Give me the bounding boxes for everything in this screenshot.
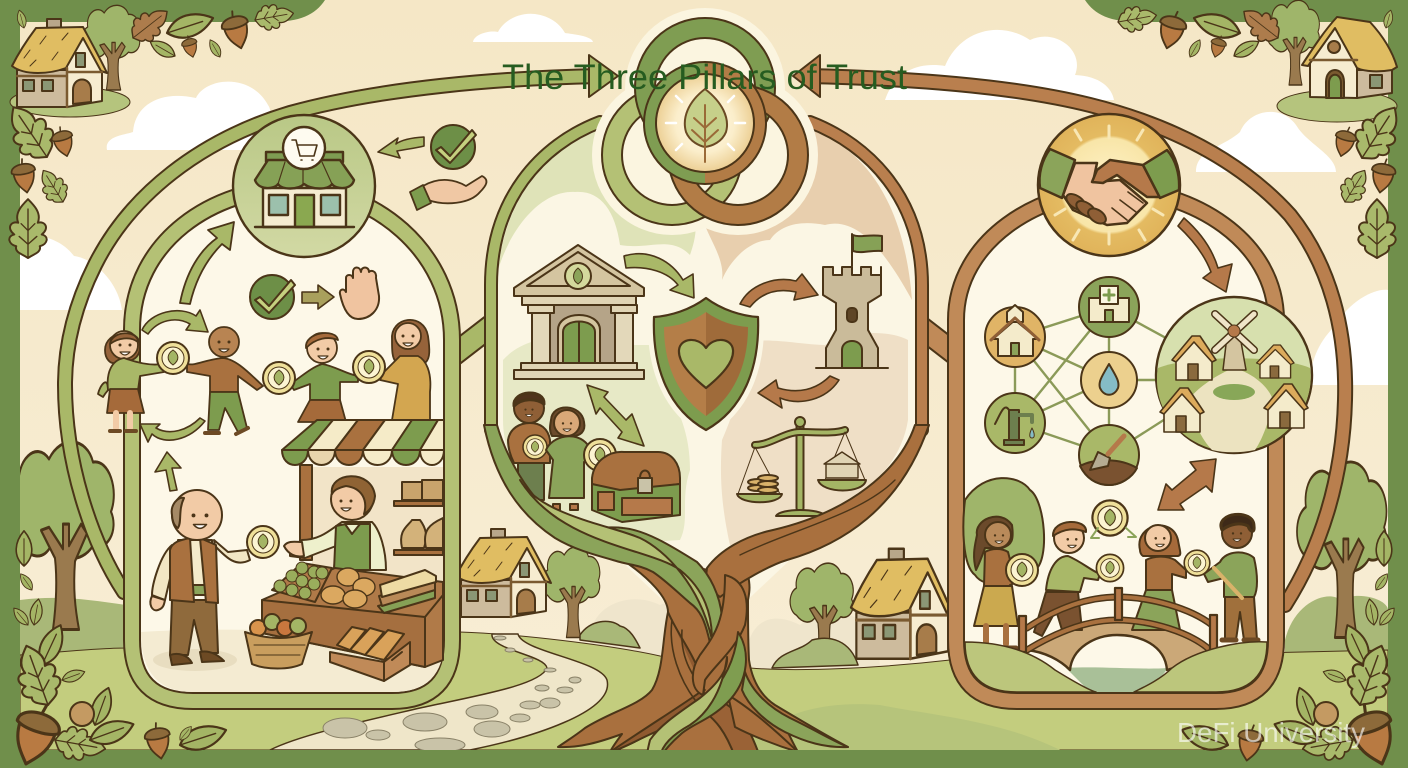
central coin with arrows xyxy=(1091,500,1136,538)
icon: shield with heart xyxy=(654,298,758,430)
person: bald man xyxy=(187,327,263,434)
background trees xyxy=(8,442,1386,668)
up arrow xyxy=(155,452,181,491)
icon: castle tower xyxy=(816,234,888,368)
hand xyxy=(340,268,379,319)
person: girl xyxy=(98,331,164,431)
ring right xyxy=(678,95,798,215)
light green lower strand xyxy=(647,657,727,757)
lower left strand highlight xyxy=(610,612,704,752)
exchange arrow bottom xyxy=(140,418,205,442)
top-left corner cottage xyxy=(10,5,140,117)
icon: store circle xyxy=(233,115,375,257)
fingers brown xyxy=(1064,191,1109,227)
folded cloths xyxy=(378,570,436,613)
icon: open hand xyxy=(410,176,486,210)
icon: top check xyxy=(431,125,476,169)
foliage: top-left xyxy=(0,1,296,258)
node: water xyxy=(1081,352,1137,408)
tint upper right xyxy=(705,130,912,300)
pillar side strokes xyxy=(491,122,922,430)
arrowhead: brown xyxy=(793,55,820,97)
person: woman xyxy=(380,320,430,420)
foliage: bottom-right xyxy=(1179,531,1403,768)
awning xyxy=(282,420,444,465)
green limb upper left xyxy=(484,425,722,643)
icon: balance scale xyxy=(737,417,866,516)
tint lower right xyxy=(721,333,908,545)
panel: left arch xyxy=(132,188,452,701)
bridge xyxy=(1027,620,1210,692)
arrow: check to store xyxy=(378,137,424,158)
person: girl with coin xyxy=(974,517,1038,648)
node: trowel xyxy=(1079,425,1139,485)
outer brown arc xyxy=(806,76,1345,605)
hand right brown xyxy=(1092,160,1160,197)
icon: tree behind people xyxy=(963,478,1044,584)
double arrow xyxy=(1158,459,1216,510)
distant hills xyxy=(20,596,1388,670)
rolling ground xyxy=(20,632,1388,750)
exchange arrow top xyxy=(142,310,208,334)
people with coins xyxy=(508,393,616,510)
cuff left xyxy=(1039,149,1075,198)
halo xyxy=(592,8,818,235)
brown braid xyxy=(693,575,747,695)
node: clinic xyxy=(1079,277,1139,337)
twisted tree trunk xyxy=(484,425,929,757)
floor shading xyxy=(141,630,444,692)
leaf xyxy=(685,89,727,147)
arrow: handshake to village xyxy=(1178,218,1232,292)
market stall xyxy=(247,420,444,667)
hand left skin xyxy=(1063,163,1147,225)
centre disc xyxy=(643,61,767,185)
person: boy with hammer xyxy=(1204,514,1258,640)
cuff right xyxy=(1143,150,1179,198)
watermark: DeFi University xyxy=(1177,717,1365,748)
arrow: shield to tower xyxy=(740,274,818,307)
brown limb upper right xyxy=(705,425,929,597)
icon: check arrow hand xyxy=(250,268,379,319)
coins in row xyxy=(157,342,385,394)
foliage: top-right xyxy=(1116,1,1408,258)
arrow: curve up to store xyxy=(180,222,234,304)
small arrows xyxy=(1091,528,1136,538)
ring left xyxy=(612,95,732,215)
person: boy with coin xyxy=(1034,522,1124,636)
panel: centre pillar xyxy=(491,125,922,640)
arrowhead: green xyxy=(589,55,618,97)
person: boy xyxy=(290,333,358,422)
coin xyxy=(247,526,279,558)
trunk mass xyxy=(558,558,848,757)
person: elderly customer xyxy=(150,490,250,671)
outer green arc xyxy=(65,76,600,592)
windmill xyxy=(1223,336,1246,370)
panel: right arch xyxy=(956,190,1276,701)
crate of bread xyxy=(330,627,410,681)
bread buns xyxy=(321,568,375,608)
post xyxy=(300,465,312,560)
node: village xyxy=(1156,297,1312,453)
bridge rail xyxy=(1019,588,1217,652)
title: The Three Pillars of Trust xyxy=(502,58,907,97)
icon: handshake medallion xyxy=(1038,114,1180,256)
houses xyxy=(1172,336,1216,380)
arrow: temple to chest xyxy=(587,385,644,446)
right green root xyxy=(742,672,848,747)
stall back xyxy=(312,467,443,597)
clouds xyxy=(20,14,1388,385)
panel connector branches xyxy=(452,322,958,356)
person: woman with coin xyxy=(1132,525,1210,630)
node: school xyxy=(985,305,1045,367)
arrow: tower to shield xyxy=(758,376,839,408)
cottages in valley xyxy=(456,529,954,659)
icon: temple bank xyxy=(514,245,644,379)
stream xyxy=(1066,667,1168,692)
cobblestone path xyxy=(270,634,608,752)
top-right corner cottage xyxy=(1267,0,1397,122)
icon: treasure chest xyxy=(592,452,680,522)
lower right root xyxy=(705,700,760,757)
counter xyxy=(262,568,443,667)
tint lower left xyxy=(503,337,690,545)
arrow: temple to shield xyxy=(624,254,694,298)
finger lines xyxy=(1112,192,1143,220)
produce tray xyxy=(272,562,332,602)
ring top xyxy=(645,28,765,148)
shelves and jars xyxy=(394,480,443,555)
shopkeeper xyxy=(284,476,386,570)
foliage: bottom-left xyxy=(5,531,229,768)
central rings emblem xyxy=(592,8,818,235)
node: pump xyxy=(985,393,1045,453)
arch xyxy=(1027,620,1210,670)
tint upper left xyxy=(498,130,696,270)
dark green lower strand xyxy=(647,632,746,757)
grass banks xyxy=(965,642,1267,692)
basket of fruit xyxy=(245,614,312,668)
network links xyxy=(1015,307,1234,455)
arrow xyxy=(302,285,334,309)
